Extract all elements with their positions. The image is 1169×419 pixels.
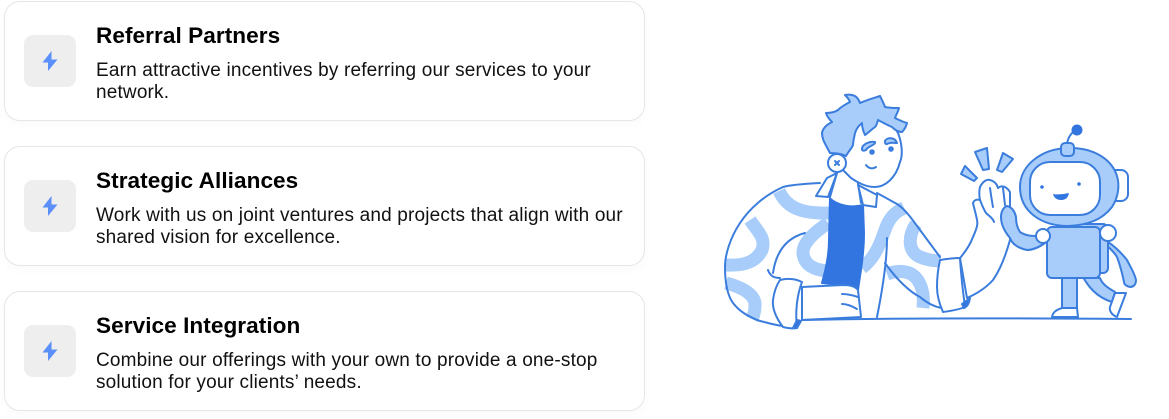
man: torso and jacket (725, 173, 943, 328)
man: face (828, 112, 902, 187)
burst marks (961, 148, 1013, 181)
text block (96, 350, 598, 393)
text block: shared vision for excellence. (96, 227, 341, 248)
icon: lightning bolt (24, 325, 76, 377)
robot: front shoe (1052, 308, 1078, 317)
panel: Service Integration (4, 291, 645, 411)
text block: Combine our offerings with your own to provide a one-stop (96, 350, 598, 371)
man: raised hand and cuff (937, 180, 1010, 312)
panel: Referral Partners (4, 1, 645, 121)
panel: Strategic Alliances (4, 146, 645, 266)
robot: antenna (1067, 130, 1076, 144)
icon: lightning bolt (24, 180, 76, 232)
robot: head (1020, 148, 1118, 226)
man: left cuff and resting hand (773, 279, 861, 328)
text block (96, 60, 591, 103)
man: dark blue shirt (822, 197, 864, 290)
text block: network. (96, 82, 169, 103)
heading: Service Integration (96, 313, 300, 338)
text block: solution for your clients’ needs. (96, 372, 362, 393)
robot: right arm (1103, 240, 1136, 287)
robot: front leg (1062, 278, 1077, 308)
robot: ear (1106, 170, 1128, 201)
man: neck and collar (816, 173, 877, 207)
robot: antenna base (1061, 143, 1074, 156)
robot: body back panel (1060, 224, 1108, 273)
text block: Earn attractive incentives by referring our services to your (96, 60, 591, 81)
robot: left arm (1001, 206, 1045, 250)
man: hair (822, 95, 907, 156)
icon: lightning bolt (24, 35, 76, 87)
robot: face (1030, 162, 1100, 215)
heading: Referral Partners (96, 23, 280, 48)
robot: shoulders (1036, 229, 1050, 243)
robot: back leg (1083, 277, 1115, 302)
robot (1001, 126, 1136, 317)
heading: Strategic Alliances (96, 168, 298, 193)
robot: back shoe (1110, 293, 1126, 317)
text block (96, 205, 623, 248)
table line (802, 318, 1131, 320)
text block: Work with us on joint ventures and projects that align with our (96, 205, 623, 226)
robot: body (1047, 227, 1100, 278)
